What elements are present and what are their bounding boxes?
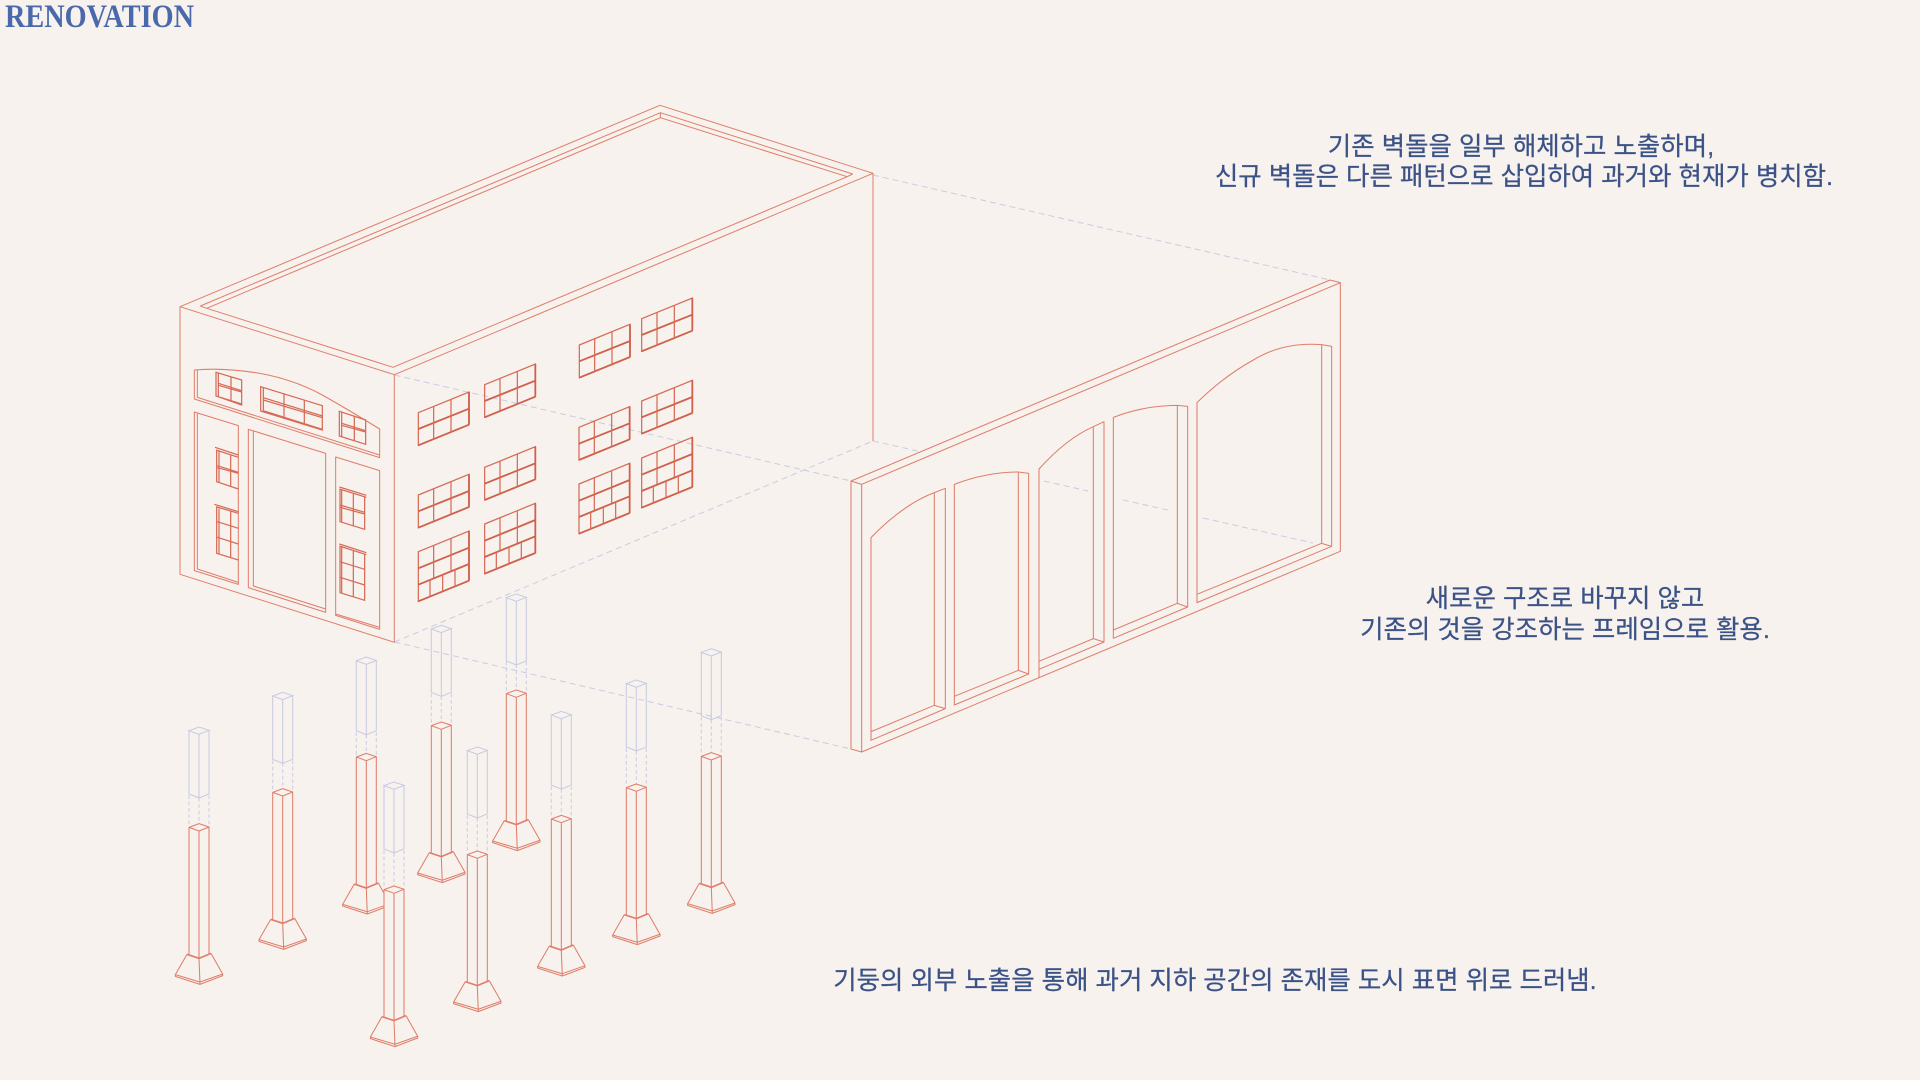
left panel window lower [214,504,238,560]
projection lines [394,175,1330,749]
text: brick wall note [1215,133,1833,191]
building massing and roof [180,105,873,642]
building side windows [418,298,692,601]
transom window right [339,411,366,444]
window G [579,407,630,460]
window E [418,474,469,528]
window L [642,437,692,508]
window H [642,380,692,434]
right door panel [336,457,380,629]
arch bay 5 [1197,344,1332,603]
window B [485,364,535,417]
transom window center [261,387,322,430]
wall outline [851,280,1340,752]
window C [579,324,630,378]
window J [485,503,535,574]
arched transom panel [194,369,380,458]
center door panel [248,429,326,612]
roof parapet inner line [200,113,853,367]
text: brick wall note: 기존 벽돌을 일부 해체하고 노출하며, [1328,133,1714,161]
pillar 6 [454,747,501,1012]
window K [579,463,630,534]
building vertical edges [180,173,873,642]
window I [418,531,469,601]
pillar 7 [493,594,540,851]
pillar 8 [538,711,585,976]
pillar 3 [343,657,390,914]
arch bay 2 [954,472,1029,705]
right panel window lower [339,544,366,600]
window D [642,298,692,351]
text: frame note: 기존의 것을 강조하는 프레임으로 활용. [1360,616,1770,644]
text: frame note [1360,585,1770,644]
text: frame note: 새로운 구조로 바꾸지 않고 [1426,585,1704,613]
pillar 2 [259,692,306,949]
building front facade [194,369,380,629]
title: RENOVATION [5,0,194,35]
pillar 10 [688,649,735,913]
pillar 1 [175,727,223,984]
arch bay 3 [1039,422,1104,678]
left door panel [194,412,238,584]
transom window left [216,372,242,405]
right panel window upper [339,487,366,529]
left panel window upper [215,447,238,489]
window A [418,392,469,445]
pillar 5 [418,625,465,883]
arched screen wall [851,280,1340,752]
window F [485,447,535,500]
arch bay 1 [871,488,945,740]
text: brick wall note: 신규 벽돌은 다른 패턴으로 삽입하여 과거와 현재가 병치함. [1215,163,1833,191]
text: pillar note: 기둥의 외부 노출을 통해 과거 지하 공간의 존재를 도시 표면 위로 드러냄. [833,967,1597,995]
pillar 9 [613,680,660,945]
pillar 4 [370,782,418,1047]
roof outline [180,105,873,375]
arch bay 4 [1113,405,1188,638]
